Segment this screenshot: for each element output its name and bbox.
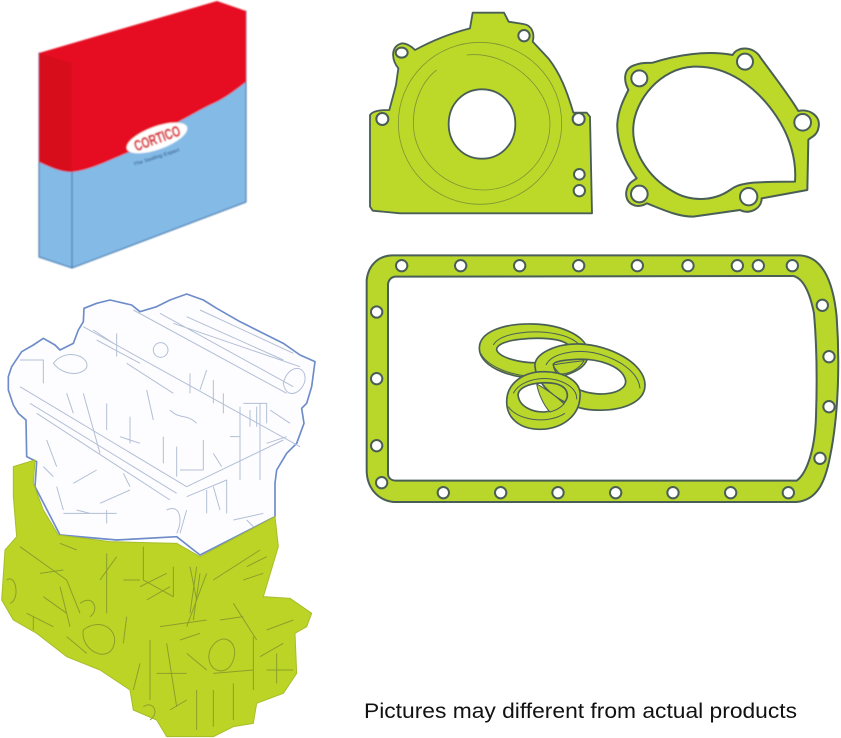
seal cover plate bbox=[370, 13, 592, 213]
seal ring: overlap band inside right ring bbox=[553, 361, 584, 374]
engine upper line work bbox=[20, 310, 305, 533]
box corner edge bbox=[71, 172, 73, 268]
oil pan bolt holes bbox=[371, 260, 835, 498]
seal cover bolt holes bbox=[376, 30, 585, 196]
box red shading bbox=[39, 53, 72, 172]
gasket: rear main seal cover bbox=[370, 13, 592, 213]
box blue lower body bbox=[39, 11, 246, 268]
box brand logo: CORTICO bbox=[132, 123, 183, 155]
seal ring: front small bbox=[507, 372, 580, 429]
water pump ring bbox=[617, 49, 819, 217]
seal ring: upper left bbox=[479, 324, 588, 379]
seal ring: band visible through small ring bbox=[537, 384, 564, 412]
seal cover concentric rings bbox=[398, 42, 562, 204]
engine illustration bbox=[2, 294, 315, 737]
gasket: oil pan with rings bbox=[367, 255, 838, 502]
box tagline: The Sealing Expert bbox=[133, 147, 181, 168]
engine upper white part bbox=[8, 294, 315, 555]
product box bbox=[39, 1, 246, 268]
gasket: water pump bbox=[617, 49, 819, 217]
box brand logo bbox=[123, 116, 191, 160]
water pump bolt holes bbox=[631, 54, 811, 205]
box red upper band bbox=[39, 1, 246, 172]
disclaimer caption: Pictures may different from actual products bbox=[364, 699, 797, 723]
engine lower line work bbox=[7, 543, 293, 730]
seal ring: right bbox=[535, 344, 645, 410]
oil pan frame bbox=[367, 255, 838, 502]
engine lower green part bbox=[2, 460, 312, 737]
